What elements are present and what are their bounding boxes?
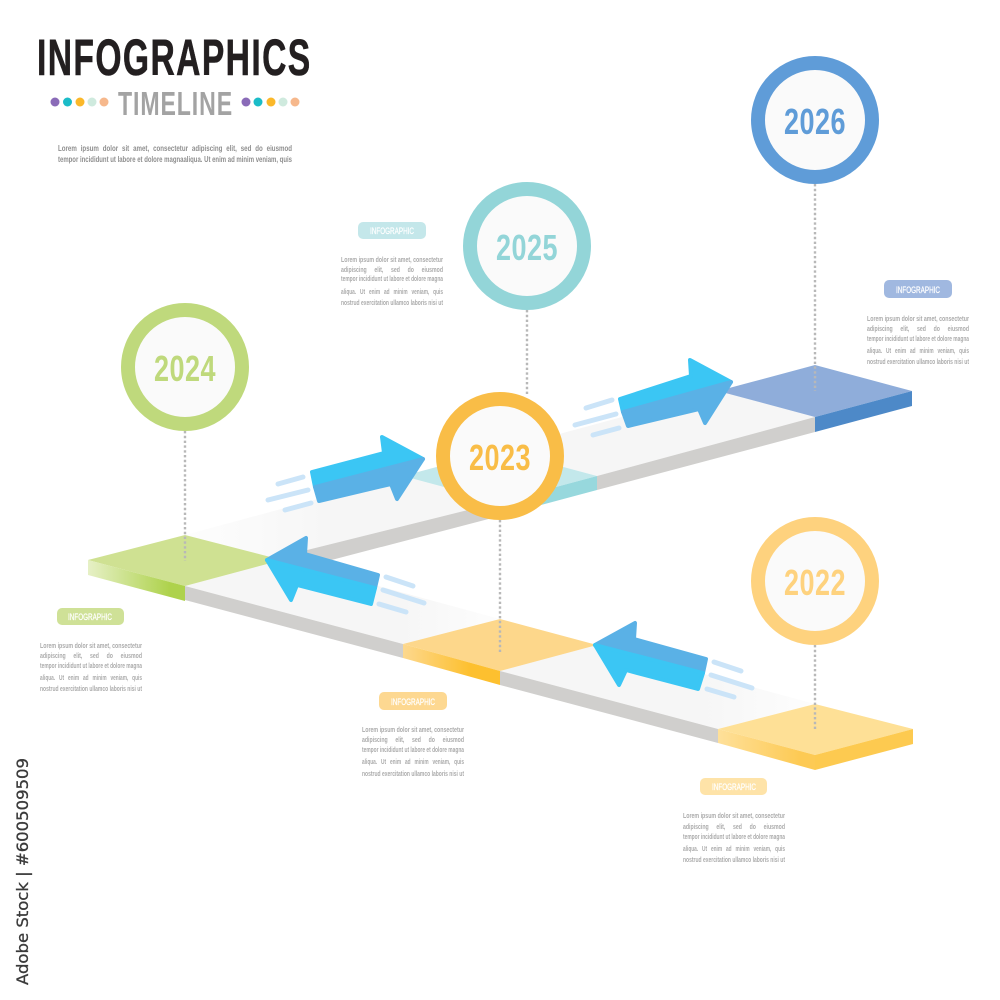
label pill: 2025: INFOGRAPHIC xyxy=(370,226,414,237)
text block: 2024: adipiscing elit, sed do eiusmod xyxy=(40,651,142,660)
tile: 2023 orange xyxy=(403,619,597,685)
dotted connector: 2023 xyxy=(499,520,501,652)
text block: 2023: tempor incididunt ut labore et dolore magna xyxy=(362,745,465,754)
decorative dots: right of subtitle xyxy=(242,98,300,106)
text block: 2024: nostrud exercitation ullamco laboris nisi ut xyxy=(40,684,142,693)
circle: 2024 xyxy=(128,310,242,424)
text block: 2025: Lorem ipsum dolor sit amet, consectetur xyxy=(341,255,443,264)
circle: 2026 xyxy=(758,63,872,177)
intro text: tempor incididunt ut labore et dolore magnaaliqua. Ut enim ad minim veniam, quis xyxy=(58,154,292,164)
text block: 2024: aliqua. Ut enim ad minim veniam, quis xyxy=(40,673,142,682)
tile: 2025 teal xyxy=(403,450,597,516)
text block: 2022: adipiscing elit, sed do eiusmod xyxy=(683,822,785,831)
circle: 2022 xyxy=(758,524,872,638)
text block: 2025 xyxy=(341,255,444,307)
text block: 2023: nostrud exercitation ullamco laboris nisi ut xyxy=(362,769,464,778)
label pill: 2023: INFOGRAPHIC xyxy=(391,697,435,708)
speed lines: arrow 3 xyxy=(379,577,424,612)
text block: 2022: Lorem ipsum dolor sit amet, consectetur xyxy=(683,811,785,820)
intro text: Lorem ipsum dolor sit amet, consectetur adipiscing elit, sed do eiusmod xyxy=(58,143,292,153)
text block: 2026 xyxy=(867,314,970,366)
vertical image id text: Adobe Stock | #600509509 xyxy=(13,758,32,985)
circle: 2024: 2024 xyxy=(154,348,216,389)
tile: 2026 blue xyxy=(718,365,912,432)
arrow: toward 2023 xyxy=(595,623,706,689)
road: lower strip 2023 to 2022 xyxy=(500,645,815,743)
arrow: toward 2025 xyxy=(312,437,423,501)
circle: 2026: 2026 xyxy=(784,101,846,142)
text block: 2023: aliqua. Ut enim ad minim veniam, quis xyxy=(362,757,464,766)
label pill: 2024 xyxy=(57,608,124,625)
decorative dots: left of subtitle xyxy=(50,98,108,106)
text block: 2025: adipiscing elit, sed do eiusmod xyxy=(341,265,443,274)
label pill: 2022 xyxy=(700,778,767,795)
subtitle: TIMELINE xyxy=(118,86,232,123)
dotted connector: 2024 xyxy=(184,431,186,561)
road: upper strip 2024 to 2025 xyxy=(185,476,500,563)
text block: 2024 xyxy=(40,641,143,693)
text block: 2025: aliqua. Ut enim ad minim veniam, quis xyxy=(341,287,443,296)
dotted connector: 2022 xyxy=(814,645,816,729)
text block: 2025: nostrud exercitation ullamco laboris nisi ut xyxy=(341,298,443,307)
title: INFOGRAPHICS xyxy=(37,30,310,87)
intro text xyxy=(58,143,292,164)
speed lines: arrow 4 xyxy=(707,662,752,697)
label pill: 2026: INFOGRAPHIC xyxy=(896,285,940,296)
arrow: toward 2026 xyxy=(620,360,731,426)
dotted connector: 2025 xyxy=(526,310,528,395)
circle: 2023 xyxy=(443,399,557,513)
dotted connector: 2026 xyxy=(814,184,816,391)
circle: 2025 xyxy=(470,189,584,303)
text block: 2023: adipiscing elit, sed do eiusmod xyxy=(362,735,464,744)
tile: 2022 yellow xyxy=(718,704,913,770)
label pill: 2022: INFOGRAPHIC xyxy=(712,782,756,793)
text block: 2023 xyxy=(362,725,465,778)
circle: 2022: 2022 xyxy=(784,562,846,603)
text block: 2022: nostrud exercitation ullamco laboris nisi ut xyxy=(683,855,785,864)
circle: 2025: 2025 xyxy=(496,227,558,268)
speed lines: arrow 2 xyxy=(575,400,619,435)
text block: 2022 xyxy=(683,811,786,864)
road: upper strip 2025 to 2026 xyxy=(500,391,815,490)
speed lines: arrow 1 xyxy=(268,477,311,510)
circle: 2023: 2023 xyxy=(469,437,531,478)
label pill: 2025 xyxy=(358,222,426,239)
text block: 2023: Lorem ipsum dolor sit amet, consectetur xyxy=(362,725,464,734)
label pill: 2024: INFOGRAPHIC xyxy=(68,612,112,623)
text block: 2025: tempor incididunt ut labore et dolore magna xyxy=(341,274,444,283)
arrow: toward 2024 xyxy=(267,538,378,604)
label pill: 2026 xyxy=(884,280,952,298)
label pill: 2023 xyxy=(379,692,447,710)
text block: 2022: tempor incididunt ut labore et dolore magna xyxy=(683,832,786,841)
text block: 2024: tempor incididunt ut labore et dolore magna xyxy=(40,661,143,670)
text block: 2022: aliqua. Ut enim ad minim veniam, quis xyxy=(683,844,785,853)
text block: 2024: Lorem ipsum dolor sit amet, consectetur xyxy=(40,641,142,650)
tile: 2024 green xyxy=(88,535,282,601)
road: lower strip 2024 to 2023 xyxy=(185,560,500,658)
